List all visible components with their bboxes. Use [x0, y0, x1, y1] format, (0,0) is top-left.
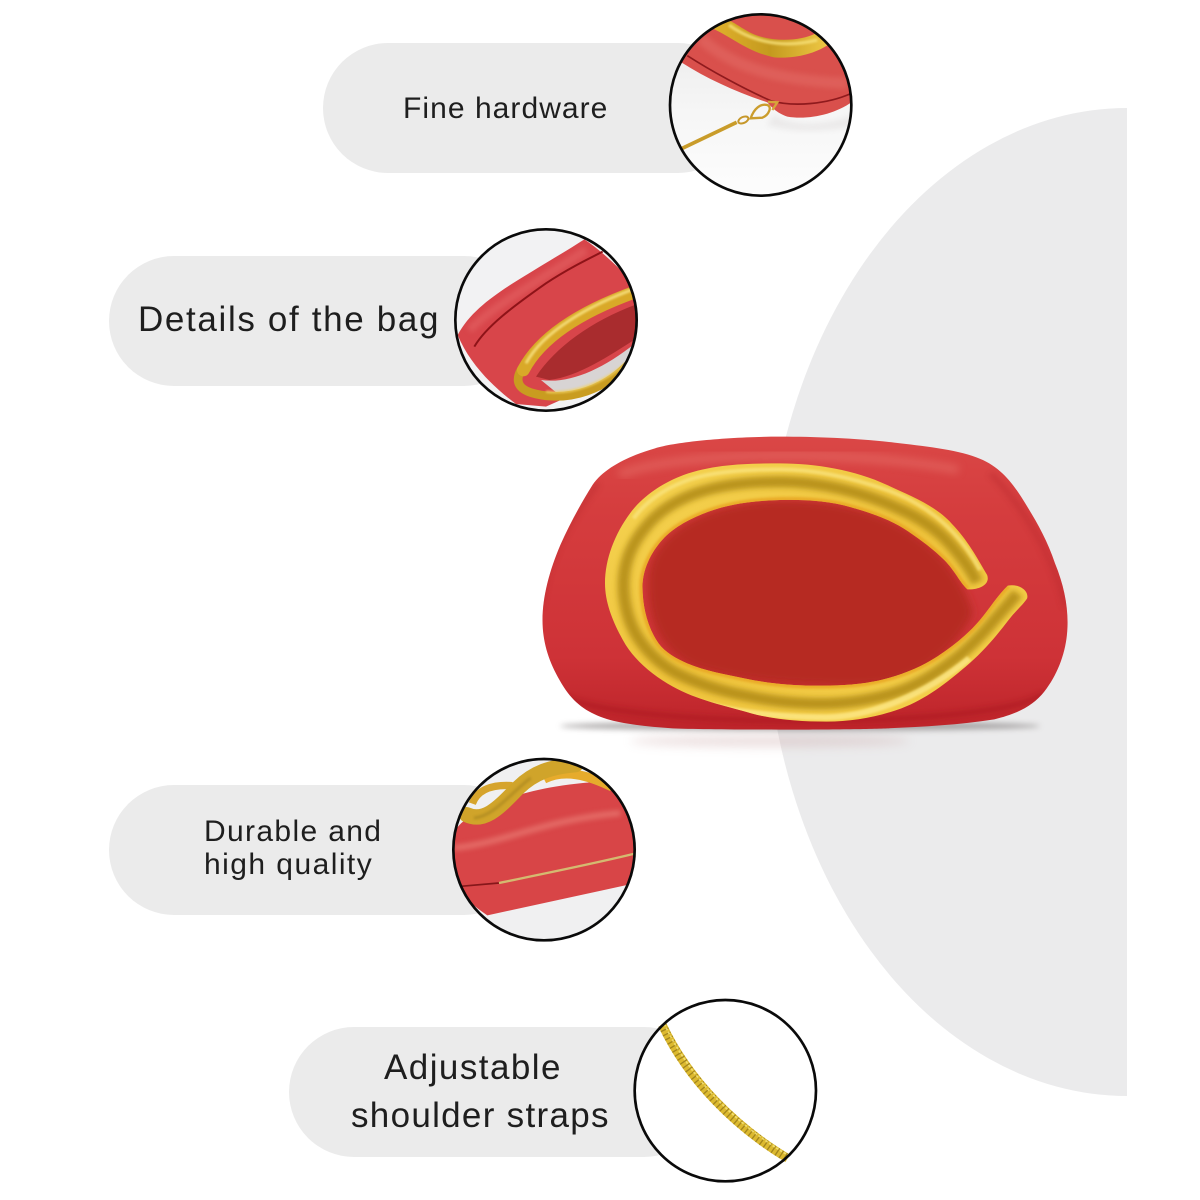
label: adjustable shoulder straps [351, 1048, 610, 1135]
gold ring as a continuous rounded loop [514, 362, 625, 401]
label: durable and high quality: Durable and [204, 815, 382, 848]
clasp and chain [682, 122, 737, 148]
gold C handle [605, 463, 1027, 722]
detail circle: seam [451, 759, 644, 940]
label: durable and high quality [204, 815, 382, 881]
detail circle: bag corner [455, 229, 643, 411]
label: durable and high quality: high quality [204, 848, 373, 881]
detail circle: chain strap [635, 1000, 816, 1181]
inner shadow of handle [536, 303, 639, 380]
photo layer: bag and detail circles [452, 13, 1068, 1183]
recessed centre of the bag [648, 500, 973, 685]
label: fine hardware: Fine hardware [403, 92, 608, 125]
pill: adjustable shoulder straps [289, 1027, 709, 1157]
label: adjustable shoulder straps: Adjustable [384, 1048, 562, 1087]
red bag edge [682, 16, 850, 118]
label: details of the bag: Details of the bag [138, 300, 440, 339]
product image: red clutch bag [541, 437, 1068, 730]
pill: fine hardware [323, 43, 743, 173]
pill: durable and high quality [109, 785, 529, 915]
soft floor shadow under the bag [560, 721, 1040, 747]
gold handle segment [712, 20, 828, 58]
gold handle loop [472, 785, 512, 804]
detail circle: fine hardware [670, 8, 867, 196]
label: adjustable shoulder straps: shoulder straps [351, 1096, 610, 1135]
pill: details of the bag [109, 256, 529, 386]
